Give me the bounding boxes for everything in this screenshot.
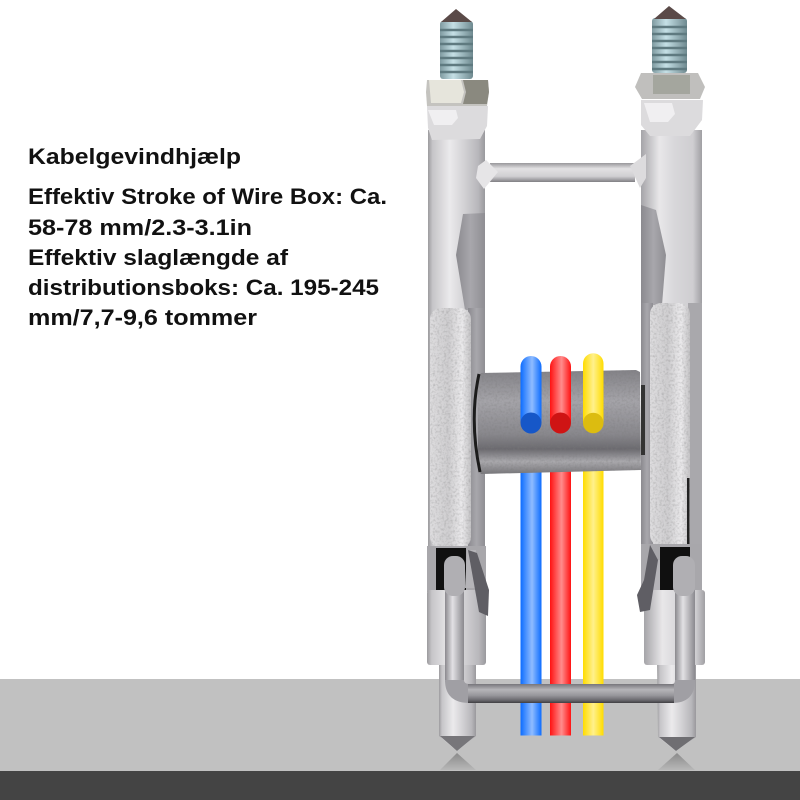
left pin xyxy=(439,660,476,751)
wire hook xyxy=(444,556,695,703)
specification text block: Effektiv Stroke of Wire Box: Ca. xyxy=(28,184,387,209)
specification text block: distributionsboks: Ca. 195-245 xyxy=(28,275,379,300)
left threaded stud xyxy=(440,9,473,79)
specification text block xyxy=(28,184,387,330)
heading: Kabelgevindhjælp xyxy=(28,144,241,169)
right sliding panel xyxy=(650,303,690,546)
central cylinder xyxy=(474,370,643,474)
yellow wire xyxy=(583,353,604,433)
left nuts xyxy=(426,80,489,140)
right nuts xyxy=(635,73,705,136)
specification text block: Effektiv slaglængde af xyxy=(28,245,289,270)
left lower clamp xyxy=(427,546,489,665)
left tube xyxy=(428,130,485,548)
wires behind the cylinder, lower part xyxy=(520,470,604,736)
red wire xyxy=(550,356,571,434)
specification text block: 58-78 mm/2.3-3.1in xyxy=(28,215,252,240)
cable threading tool xyxy=(426,6,705,770)
floor band xyxy=(0,679,800,772)
left lower strip xyxy=(468,308,485,548)
left slot and shaded strip xyxy=(456,213,485,310)
blue wire xyxy=(520,356,542,434)
right pin xyxy=(657,660,696,751)
left sliding panel xyxy=(430,308,471,548)
right panel edge shadow xyxy=(687,478,690,546)
pin shadows xyxy=(440,753,695,770)
right lower strip xyxy=(641,303,653,546)
right tube xyxy=(641,130,702,548)
right lower clamp xyxy=(637,544,705,665)
dark base band xyxy=(0,771,800,800)
specification text block: mm/7,7-9,6 tommer xyxy=(28,305,257,330)
right outer strip xyxy=(688,303,702,546)
right threaded stud xyxy=(652,6,687,73)
crossbar xyxy=(476,154,646,189)
right slot and shaded strip xyxy=(641,205,666,305)
